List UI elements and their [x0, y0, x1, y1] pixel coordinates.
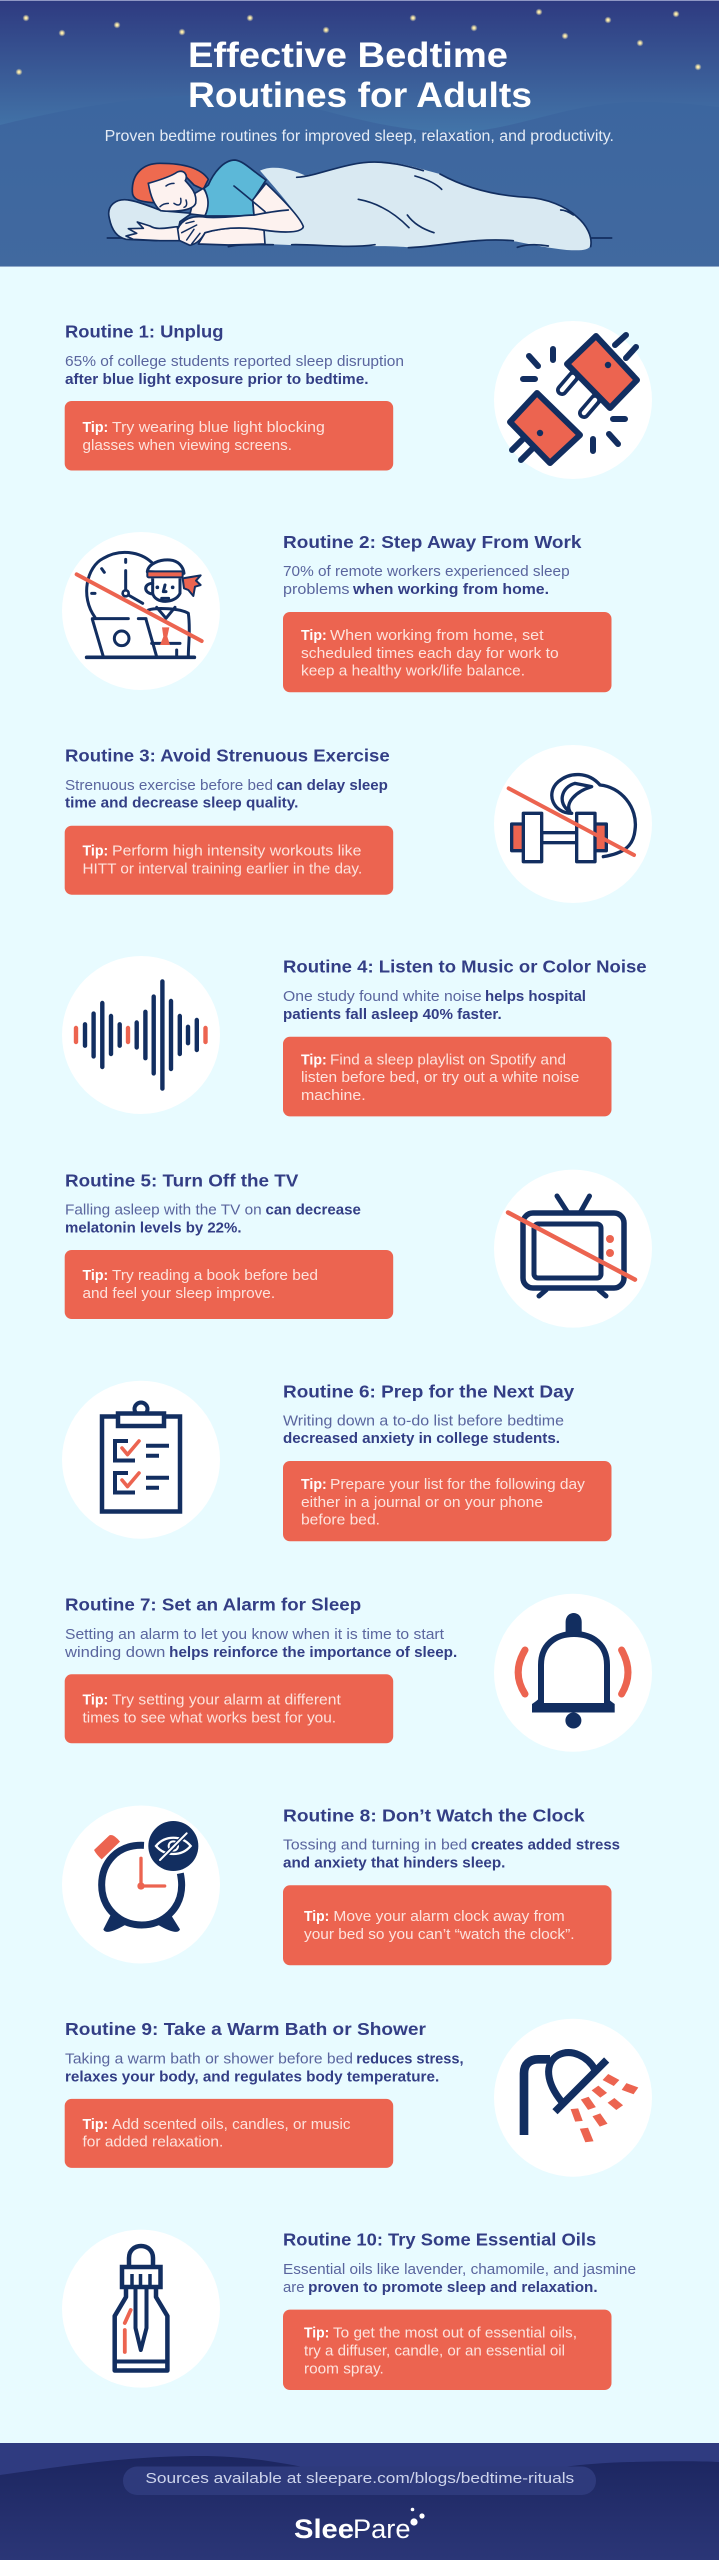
tip box: [65, 826, 393, 895]
body text: 65% of college students reported sleep disruption: [65, 354, 404, 370]
tip box: Tip:: [301, 628, 327, 644]
body text: melatonin levels by 22%.: [65, 1220, 241, 1236]
body text: time and decrease sleep quality.: [65, 796, 298, 812]
body text: Essential oils like lavender, chamomile, and jasmine: [283, 2262, 636, 2278]
heading: Routine 7: Set an Alarm for Sleep: [65, 1595, 361, 1615]
tip box: your bed so you can’t “watch the clock”.: [304, 1927, 574, 1943]
body text: One study found white noise: [283, 989, 482, 1005]
tip box: Add scented oils, candles, or music: [112, 2117, 350, 2133]
panel: routine 4: [62, 956, 647, 1116]
sources pill: Sources available at sleepare.com/blogs/bedtime-rituals: [145, 2470, 575, 2487]
heading: Routine 5: Turn Off the TV: [65, 1170, 299, 1190]
panel: routine 5: [65, 1170, 652, 1328]
header wave: [0, 95, 719, 267]
body text: decreased anxiety in college students.: [283, 1431, 560, 1447]
tip box: before bed.: [301, 1513, 380, 1529]
heading: Routine 3: Avoid Strenuous Exercise: [65, 746, 390, 766]
icon: unplugged plugs: [494, 321, 652, 479]
body text: helps reinforce the importance of sleep.: [169, 1645, 457, 1661]
tip box: Tip:: [304, 1909, 329, 1925]
body text: winding down: [64, 1645, 165, 1661]
logo: SleePare: [294, 2508, 425, 2544]
tip box: listen before bed, or try out a white noise: [301, 1070, 579, 1086]
heading: Routine 2: Step Away From Work: [283, 532, 582, 552]
illustration: person sleeping under blanket: [107, 160, 612, 250]
tip box: [283, 612, 612, 692]
subtitle: Proven bedtime routines for improved sleep, relaxation, and productivity.: [105, 128, 614, 145]
tip box: [283, 2310, 612, 2390]
stars: [16, 8, 702, 76]
body text: can decrease: [266, 1203, 361, 1219]
tip box: machine.: [301, 1088, 366, 1104]
logo: SleePare: Pare: [353, 2514, 410, 2544]
tip box: Try setting your alarm at different: [112, 1692, 341, 1708]
tip box: HITT or interval training earlier in the day.: [82, 862, 362, 878]
body text: after blue light exposure prior to bedtime.: [65, 372, 368, 388]
panel: routine 10: [62, 2230, 636, 2390]
body text: reduces stress,: [356, 2051, 464, 2067]
panel: routine 1: [65, 321, 652, 479]
body text: when working from home.: [352, 582, 549, 598]
panel: routine 6: [62, 1381, 612, 1541]
footer wave: [0, 2456, 719, 2560]
tip box: Tip:: [301, 1052, 327, 1068]
tip box: scheduled times each day for work to: [301, 646, 559, 662]
tip box: keep a healthy work/life balance.: [301, 664, 525, 680]
heading: Routine 6: Prep for the Next Day: [283, 1382, 574, 1402]
panel: routine 7: [64, 1594, 652, 1752]
icon: essential oil dropper bottle: [62, 2230, 220, 2388]
tip box: Tip:: [82, 844, 108, 860]
icon: shower head: [494, 2019, 652, 2177]
sources pill: [123, 2466, 596, 2495]
tip box: and feel your sleep improve.: [82, 1286, 275, 1302]
title: Routines for Adults: [188, 75, 532, 115]
body text: Writing down a to-do list before bedtime: [283, 1413, 564, 1429]
icon: sound wave: [62, 956, 220, 1114]
tip box: try a diffuser, candle, or an essential oil: [304, 2344, 565, 2360]
panel: routine 8: [62, 1805, 620, 1965]
tip box: Try wearing blue light blocking: [112, 420, 325, 436]
tip box: Tip:: [82, 1692, 108, 1708]
body text: 70% of remote workers experienced sleep: [283, 564, 570, 580]
tip box: [283, 1037, 612, 1116]
tip box: Try reading a book before bed: [112, 1268, 318, 1284]
body text: Tossing and turning in bed: [283, 1838, 467, 1854]
tip box: Tip:: [304, 2326, 329, 2342]
heading: Routine 9: Take a Warm Bath or Shower: [65, 2019, 426, 2039]
icon: ringing bell: [494, 1594, 652, 1752]
heading: Routine 4: Listen to Music or Color Noise: [283, 956, 647, 976]
tip box: When working from home, set: [330, 628, 544, 644]
panel: routine 9: [65, 2019, 652, 2177]
tip box: Perform high intensity workouts like: [112, 844, 361, 860]
tip box: Find a sleep playlist on Spotify and: [330, 1052, 566, 1068]
icon: alarm clock with hidden eye: [62, 1806, 220, 1964]
body text: can delay sleep: [276, 778, 388, 794]
icon: television, crossed out: [494, 1170, 652, 1328]
panel: routine 3: [65, 745, 652, 903]
body text: helps hospital: [485, 989, 586, 1005]
panel: routine 2: [62, 532, 612, 692]
body text: patients fall asleep 40% faster.: [283, 1007, 502, 1023]
body text: creates added stress: [471, 1838, 620, 1854]
icon: person working with clock, crossed out: [62, 532, 220, 690]
footer: [0, 2443, 719, 2560]
tip box: for added relaxation.: [82, 2135, 223, 2151]
body text: relaxes your body, and regulates body temperature.: [65, 2069, 439, 2085]
tip box: glasses when viewing screens.: [82, 438, 292, 454]
tip box: Tip:: [82, 420, 108, 436]
tip box: Move your alarm clock away from: [333, 1909, 565, 1925]
body text: Strenuous exercise before bed: [65, 778, 273, 794]
body text: Taking a warm bath or shower before bed: [65, 2051, 353, 2067]
logo: SleePare: Slee: [294, 2514, 354, 2544]
tip box: [65, 401, 393, 470]
tip box: [65, 1674, 393, 1743]
body text: Setting an alarm to let you know when it is time to start: [65, 1627, 444, 1643]
tip box: times to see what works best for you.: [82, 1710, 336, 1726]
tip box: [65, 1250, 393, 1319]
body text: problems: [283, 582, 350, 598]
heading: Routine 8: Don’t Watch the Clock: [283, 1805, 585, 1825]
tip box: Prepare your list for the following day: [330, 1477, 586, 1493]
tip box: room spray.: [304, 2362, 384, 2378]
tip box: To get the most out of essential oils,: [333, 2326, 577, 2342]
tip box: [283, 1885, 612, 1965]
body text: proven to promote sleep and relaxation.: [308, 2280, 598, 2296]
body text: and anxiety that hinders sleep.: [283, 1856, 505, 1872]
title: Effective Bedtime: [188, 35, 508, 75]
heading: Routine 10: Try Some Essential Oils: [283, 2230, 596, 2250]
tip box: [283, 1461, 612, 1541]
tip box: Tip:: [301, 1477, 327, 1493]
heading: Routine 1: Unplug: [65, 322, 224, 342]
tip box: Tip:: [82, 2117, 108, 2133]
header banner: [0, 0, 719, 267]
icon: dumbbell and muscle, crossed out: [494, 745, 652, 903]
icon: checklist clipboard: [62, 1381, 220, 1539]
body text: are: [283, 2280, 304, 2296]
tip box: either in a journal or on your phone: [301, 1495, 543, 1511]
body text: Falling asleep with the TV on: [65, 1203, 262, 1219]
tip box: [65, 2099, 393, 2168]
tip box: Tip:: [82, 1268, 108, 1284]
